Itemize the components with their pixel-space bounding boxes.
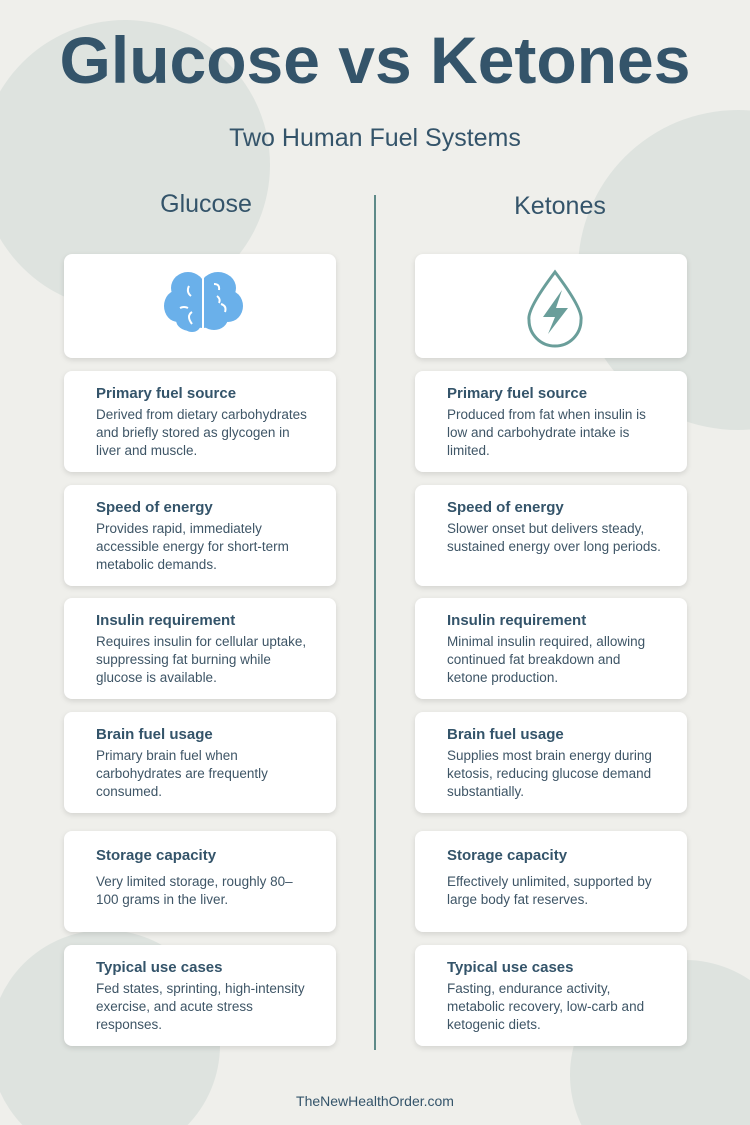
text: Minimal insulin required, allowing continued fat breakdown and ketone production.	[447, 634, 645, 685]
text: Primary brain fuel when carbohydrates are frequently consumed.	[96, 748, 268, 799]
text: Brain fuel usage	[447, 726, 564, 743]
text: Fed states, sprinting, high-intensity exercise, and acute stress responses.	[96, 981, 305, 1032]
text: Slower onset but delivers steady, sustained energy over long periods.	[447, 521, 661, 554]
heading: glucose: Glucose	[160, 190, 252, 218]
subtitle: Two Human Fuel Systems	[229, 124, 521, 152]
text: Storage capacity	[447, 847, 567, 864]
text: Insulin requirement	[447, 612, 586, 629]
icon card: drop	[415, 254, 687, 358]
text: Insulin requirement	[96, 612, 235, 629]
text: Fasting, endurance activity, metabolic recovery, low-carb and ketogenic diets.	[447, 981, 644, 1032]
icon: energy drop	[527, 270, 583, 348]
text: Very limited storage, roughly 80–100 grams in the liver.	[96, 874, 293, 907]
icon: brain	[164, 272, 243, 332]
glucose cards	[64, 371, 336, 472]
text: Provides rapid, immediately accessible energy for short-term metabolic demands.	[96, 521, 289, 572]
text: Storage capacity	[96, 847, 216, 864]
icon card: brain	[64, 254, 336, 358]
ketone cards: Primary fuel source	[447, 385, 587, 402]
text: Supplies most brain energy during ketosis, reducing glucose demand substantially.	[447, 748, 652, 799]
text: Speed of energy	[447, 499, 564, 516]
footer: TheNewHealthOrder.com	[296, 1093, 454, 1109]
text: Effectively unlimited, supported by large body fat reserves.	[447, 874, 652, 907]
glucose cards: Derived from dietary carbohydrates and briefly stored as glycogen in liver and muscle.	[96, 407, 307, 458]
heading: ketones: Ketones	[514, 192, 606, 220]
text: Typical use cases	[447, 959, 573, 976]
divider line	[374, 195, 376, 1050]
text: Speed of energy	[96, 499, 213, 516]
ketone cards: Produced from fat when insulin is low and carbohydrate intake is limited.	[447, 407, 646, 458]
glucose cards: Primary fuel source	[96, 385, 236, 402]
ketone cards	[415, 371, 687, 472]
title: Glucose vs Ketones	[60, 23, 690, 97]
text: Brain fuel usage	[96, 726, 213, 743]
text: Requires insulin for cellular uptake, suppressing fat burning while glucose is available.	[96, 634, 306, 685]
text: Typical use cases	[96, 959, 222, 976]
